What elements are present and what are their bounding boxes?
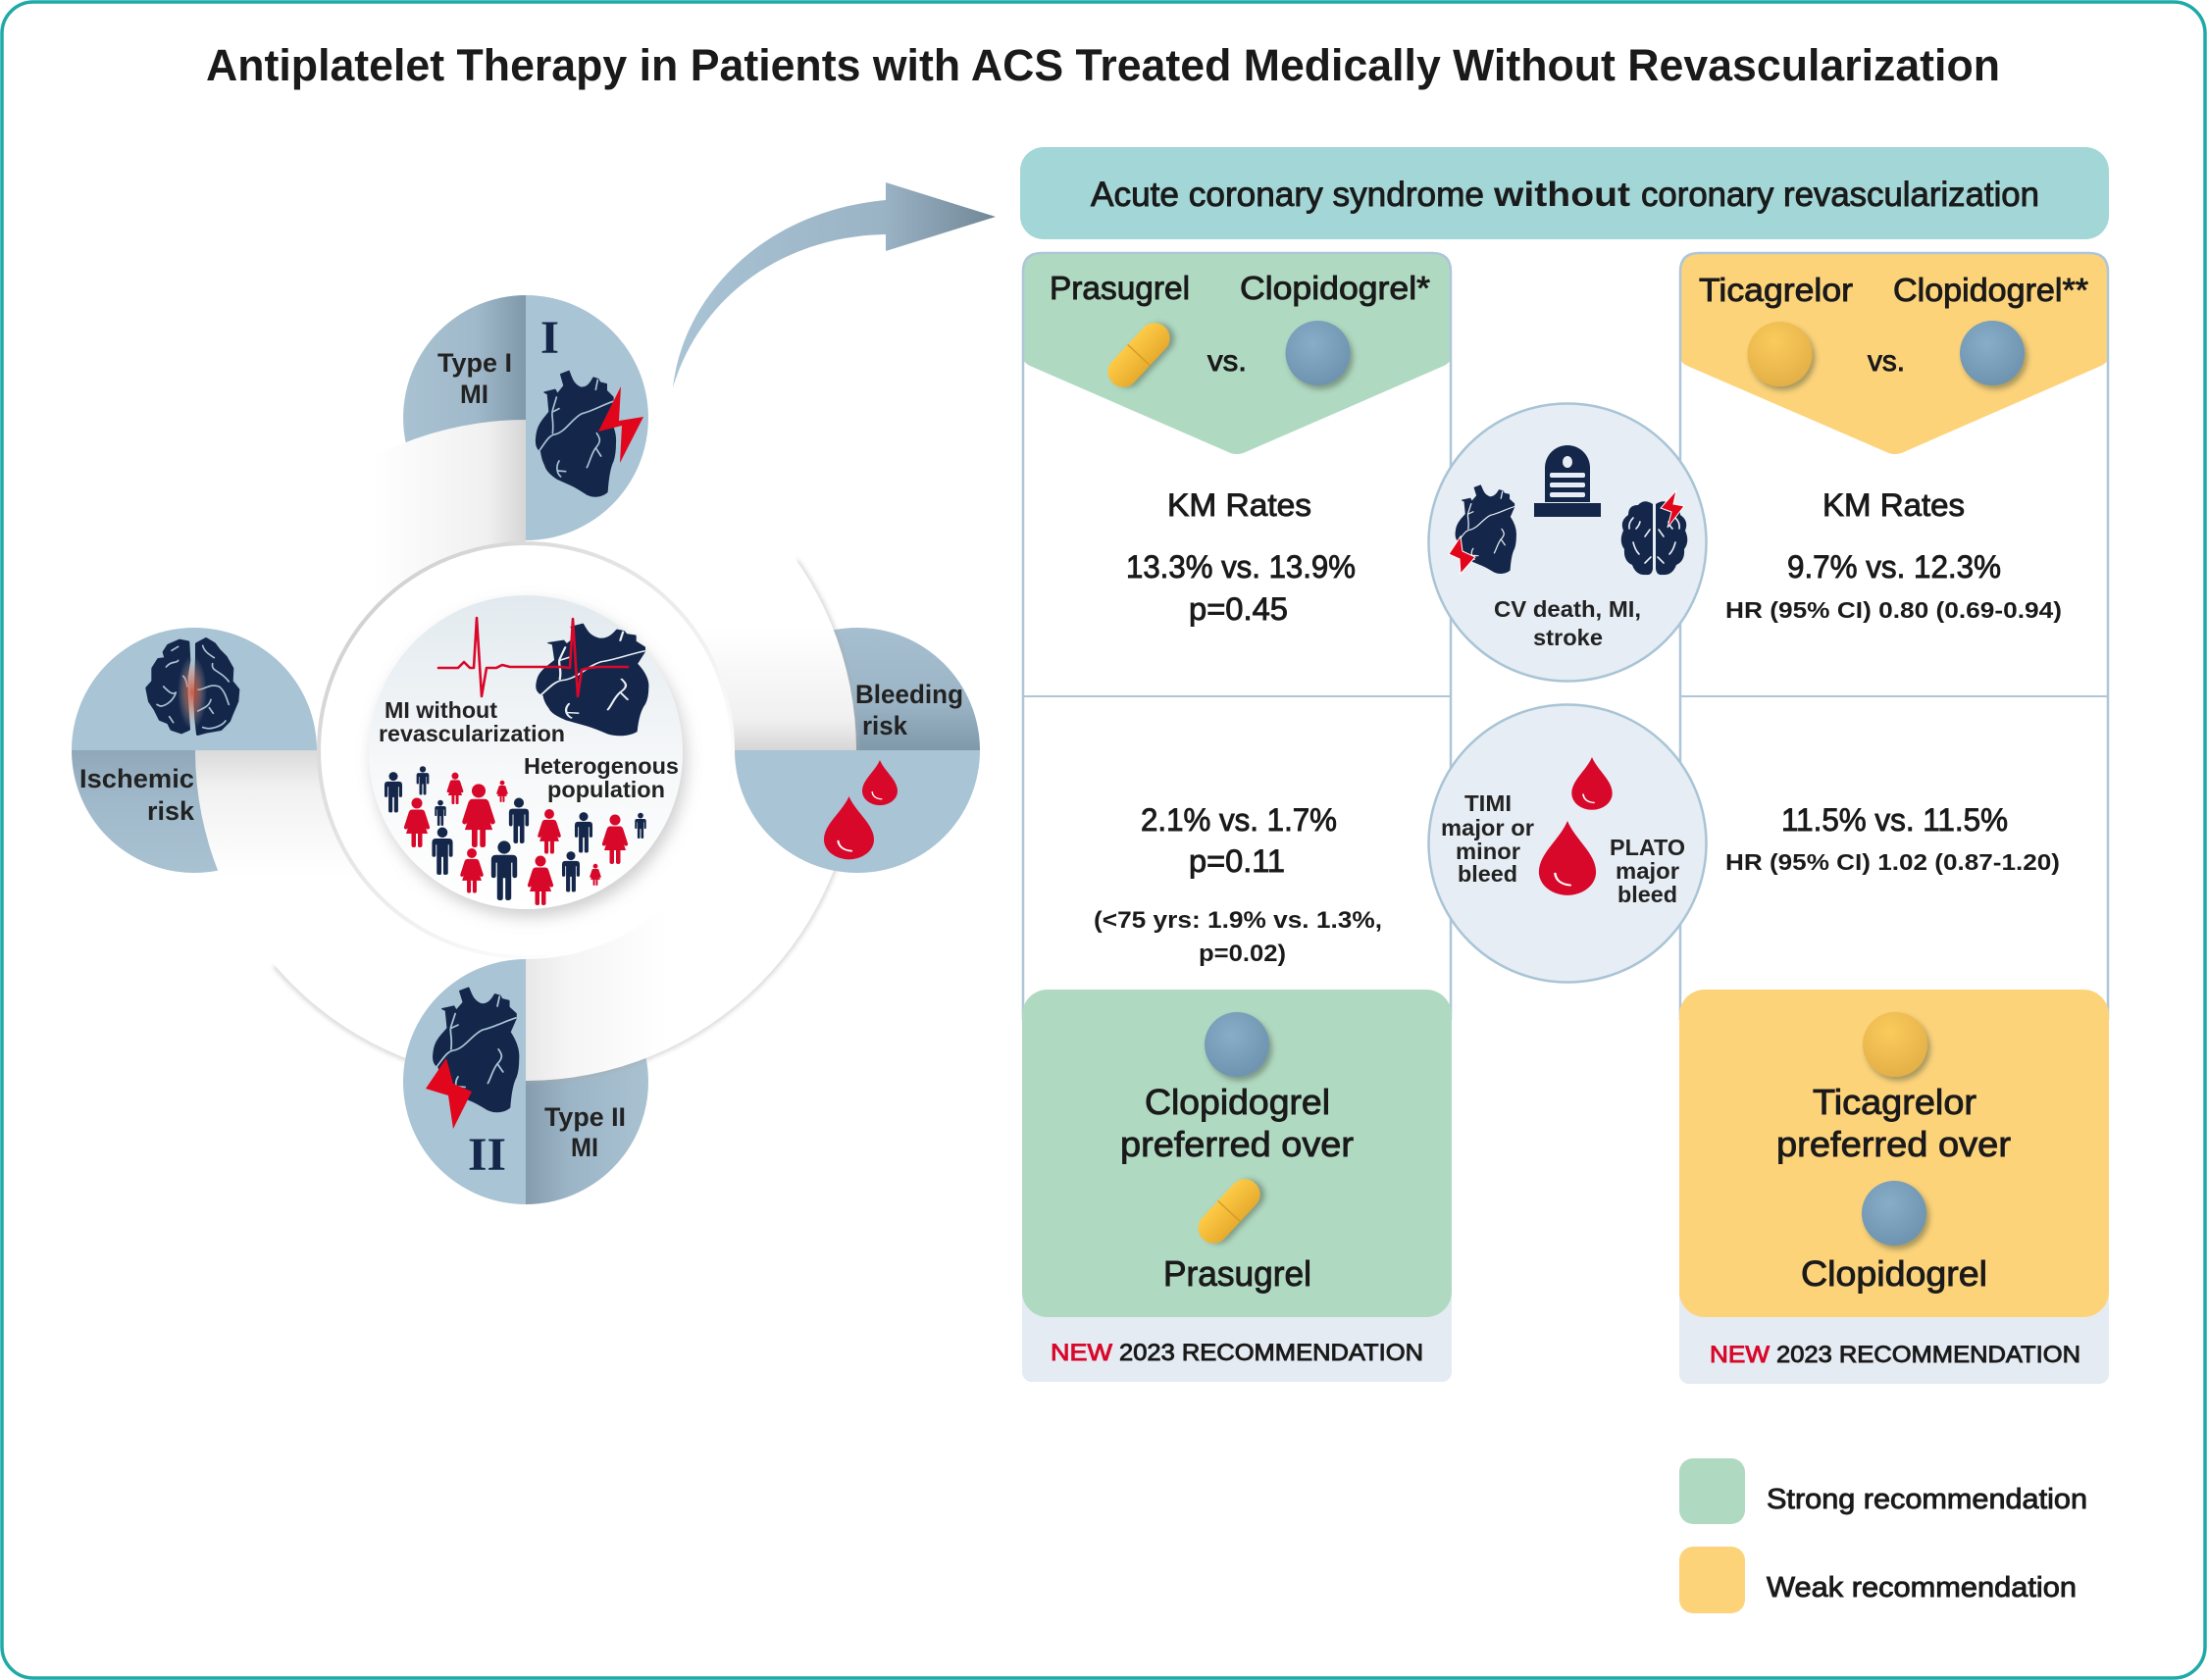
text: MI without revascularization: revascularization [379, 721, 565, 746]
ring edge shadows [275, 561, 856, 1081]
text: ticagrelor preferred [1776, 1082, 2011, 1164]
text: ischemic outcome [1725, 549, 2062, 623]
light half: Type II circle [403, 959, 526, 1204]
text: under 75 subgroup [1094, 907, 1382, 967]
text: KM rates: KM Rates [1167, 487, 1311, 523]
icon: clopidogrel tablet [1862, 1181, 1926, 1246]
panel: prasugrel vs clopidogrel [1022, 252, 1452, 1382]
panel: MI without revascularization swirl diagram [72, 295, 980, 1204]
text: ticagrelor preferred: Ticagrelor [1813, 1082, 1976, 1122]
arrow: from MI diagram to trial panels [673, 182, 996, 387]
Type I label: MI [460, 380, 488, 409]
legend swatch: weak [1679, 1547, 1745, 1613]
text: PLATO major bleed [1610, 835, 1685, 907]
Type I label [437, 348, 512, 409]
recommendation box: green [1022, 990, 1452, 1317]
Bleeding risk label: risk [862, 711, 908, 740]
text: TIMI major or minor bleed: minor [1456, 839, 1520, 864]
banner: acute coronary syndrome: Acute coronary syndrome [1091, 176, 1484, 214]
dark half: Ischemic risk circle [72, 750, 317, 873]
text: bleeding outcome [1725, 802, 2060, 875]
icon: small drop [1571, 757, 1613, 810]
Bleeding risk label: Bleeding [855, 680, 963, 709]
banner: acute coronary syndrome: coronary revascularization [1641, 176, 2039, 214]
footer text: NEW [1710, 1342, 1770, 1368]
icon: clopidogrel tablet [1285, 321, 1350, 385]
text: PLATO major bleed: PLATO [1610, 835, 1685, 860]
legend label: weak: Weak recommendation [1767, 1572, 2077, 1604]
dark half: Bleeding risk circle [735, 628, 980, 750]
text: clopidogrel preferred: preferred over [1120, 1124, 1354, 1164]
Type II label [544, 1102, 626, 1162]
banner: acute coronary syndrome [1020, 147, 2109, 239]
light half: Type I circle [526, 295, 648, 540]
icon: crowd of patients [385, 766, 646, 905]
light half: Ischemic risk circle [72, 628, 317, 750]
icon: large drop [1539, 821, 1596, 895]
text: under 75 subgroup: p=0.02) [1199, 941, 1286, 967]
text: ticagrelor preferred: preferred over [1776, 1124, 2011, 1164]
text: bleeding outcome: HR (95% CI) 1.02 (0.87-1.20) [1725, 849, 2060, 875]
Ischemic risk label [79, 764, 195, 826]
icon: clopidogrel tablet [1205, 1012, 1269, 1077]
Type II label: MI [571, 1133, 598, 1162]
icon: ticagrelor tablet [1863, 1012, 1927, 1077]
panel outline [1023, 253, 1451, 1020]
text: ischemic outcome: HR (95% CI) 0.80 (0.69-0.94) [1725, 597, 2062, 623]
ECG trace [438, 618, 628, 696]
text: heterogenous population: population [547, 777, 665, 802]
icon: tombstone [1534, 445, 1601, 517]
icon: brain with ischemic glow [147, 639, 238, 734]
recommendation footer [1679, 1275, 2109, 1384]
icon: clopidogrel tablet [1960, 321, 2025, 385]
text: ischemic outcome: p=0.45 [1189, 591, 1288, 627]
text: bleeding outcome [1141, 802, 1337, 879]
legend label: strong: Strong recommendation [1767, 1484, 2087, 1515]
text: prasugrel: Prasugrel [1163, 1253, 1311, 1294]
Prasugrel heading: Prasugrel [1050, 270, 1190, 306]
Ticagrelor heading: Ticagrelor [1699, 272, 1853, 308]
Ischemic risk label: risk [147, 796, 195, 826]
icon: center heart [537, 624, 647, 736]
text: MI without revascularization: MI without [385, 697, 497, 723]
outcome divider [1680, 695, 2108, 697]
icon: heart with bolt, type I [537, 371, 643, 496]
vs: vs. [1868, 345, 1905, 378]
numeral I: I [540, 312, 559, 364]
icon: prasugrel capsule [1102, 317, 1176, 393]
title: Antiplatelet Therapy in Patients with ACS Treated Medically Without Revascularization [206, 40, 2000, 90]
text: MI without revascularization [379, 697, 565, 746]
icon: brain with bolt [1621, 490, 1687, 575]
text: ischemic outcome: 9.7% vs. 12.3% [1787, 549, 2001, 585]
header chevron: yellow [1679, 252, 2109, 454]
icon: prasugrel capsule [1192, 1173, 1266, 1249]
icon: heart with bolt [1449, 485, 1515, 574]
ring sector: top right [526, 420, 856, 750]
Clopidogrel heading: Clopidogrel* [1240, 270, 1430, 306]
circle: CV death, MI, stroke endpoint [1428, 404, 1707, 681]
text: clopidogrel preferred: Clopidogrel [1145, 1082, 1330, 1122]
vs: vs. [1207, 345, 1247, 378]
header chevron: green [1022, 252, 1452, 454]
ring sector: bottom right [526, 750, 856, 1081]
footer text: 2023 RECOMMENDATION [1119, 1340, 1423, 1366]
outcome divider [1023, 695, 1451, 697]
legend swatch: strong [1679, 1458, 1745, 1524]
Type II label: Type II [544, 1102, 626, 1132]
dark half: Type I circle [403, 295, 526, 540]
text: clopidogrel preferred [1120, 1082, 1354, 1164]
text: clopidogrel: Clopidogrel [1801, 1253, 1987, 1294]
footer text: 2023 RECOMMENDATION [1776, 1342, 2080, 1368]
panel: ticagrelor vs clopidogrel [1679, 252, 2109, 1384]
text: under 75 subgroup: (<75 yrs: 1.9% vs. 1.3%, [1094, 907, 1382, 934]
text: heterogenous population [524, 753, 679, 802]
icon: ticagrelor tablet [1748, 322, 1813, 386]
center illustration disc [369, 595, 683, 909]
text: TIMI major or minor bleed [1441, 790, 1534, 887]
text: ischemic outcome [1126, 549, 1356, 627]
text: bleeding outcome: p=0.11 [1189, 843, 1285, 879]
Bleeding risk label [855, 680, 963, 740]
text: TIMI major or minor bleed: TIMI [1464, 790, 1512, 816]
Ischemic risk label: Ischemic [79, 764, 194, 793]
dark half: Type II circle [526, 959, 648, 1204]
recommendation box: yellow [1679, 990, 2109, 1317]
panel outline [1680, 253, 2108, 1020]
text: ischemic outcome: 13.3% vs. 13.9% [1126, 549, 1356, 585]
icon: heart with bolt, type II [426, 988, 519, 1129]
banner: acute coronary syndrome: without [1493, 176, 1630, 214]
icon: blood drops [824, 760, 898, 859]
text: heterogenous population: Heterogenous [524, 753, 679, 779]
circle: bleeding endpoint [1428, 704, 1707, 983]
center white disc [319, 543, 733, 957]
ring sector: top left [195, 420, 526, 750]
text: bleeding outcome: 11.5% vs. 11.5% [1781, 802, 2008, 838]
text: KM rates: KM Rates [1822, 487, 1965, 523]
text: endpoint label: CV death, MI, [1494, 596, 1641, 622]
text: PLATO major bleed: major [1616, 858, 1679, 884]
text: endpoint label [1494, 596, 1641, 650]
text: endpoint label: stroke [1533, 625, 1603, 650]
ring sector: bottom left [195, 750, 526, 1081]
recommendation footer [1022, 1275, 1452, 1382]
Type I label: Type I [437, 348, 512, 378]
text: TIMI major or minor bleed: major or [1441, 815, 1534, 840]
legend [1679, 1458, 2087, 1613]
footer text: NEW [1051, 1340, 1112, 1366]
light half: Bleeding risk circle [735, 750, 980, 873]
text: bleeding outcome: 2.1% vs. 1.7% [1141, 802, 1337, 838]
text: PLATO major bleed: bleed [1617, 882, 1677, 907]
Clopidogrel heading: Clopidogrel** [1893, 272, 2088, 308]
text: TIMI major or minor bleed: bleed [1458, 861, 1517, 887]
numeral II: II [468, 1129, 506, 1181]
